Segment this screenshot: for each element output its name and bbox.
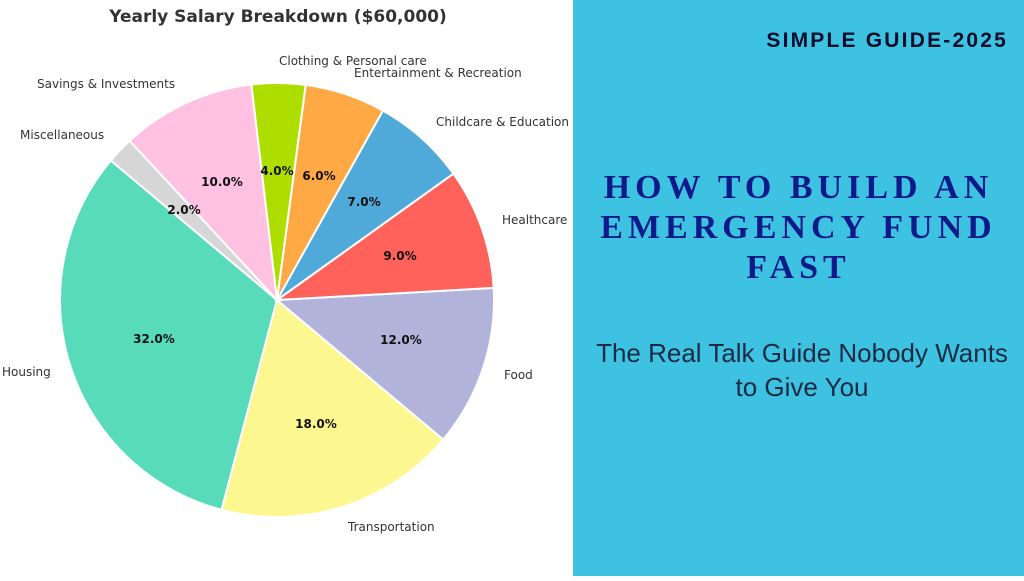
category labels: Transportation <box>347 520 435 534</box>
category labels: Entertainment & Recreation <box>354 66 522 80</box>
category labels: Food <box>504 368 533 382</box>
category labels: Miscellaneous <box>20 128 104 142</box>
main title: HOW TO BUILD AN <box>604 169 993 206</box>
tag: simple guide: SIMPLE GUIDE-2025 <box>766 29 1008 52</box>
percentage labels: 10.0% <box>201 175 243 189</box>
category labels: Savings & Investments <box>37 77 175 91</box>
percentage labels: 12.0% <box>380 333 422 347</box>
main title <box>600 169 997 286</box>
percentage labels: 32.0% <box>133 332 175 346</box>
category labels: Healthcare <box>502 213 567 227</box>
panel: pie chart <box>0 0 573 576</box>
percentage labels <box>133 164 422 431</box>
pie chart <box>60 83 494 517</box>
category labels: Childcare & Education <box>436 115 569 129</box>
panel: title side <box>573 0 1024 576</box>
main title: EMERGENCY FUND <box>600 209 997 246</box>
percentage labels: 2.0% <box>167 203 201 217</box>
subtitle <box>596 338 1008 402</box>
category labels: Housing <box>2 365 51 379</box>
subtitle: to Give You <box>736 372 868 402</box>
percentage labels: 9.0% <box>383 249 417 263</box>
main title: FAST <box>746 249 851 286</box>
chart title: Yearly Salary Breakdown ($60,000) <box>108 7 447 27</box>
percentage labels: 6.0% <box>302 169 336 183</box>
category labels <box>2 54 569 534</box>
subtitle: The Real Talk Guide Nobody Wants <box>596 338 1008 368</box>
category labels: Clothing & Personal care <box>279 54 427 68</box>
percentage labels: 4.0% <box>260 164 294 178</box>
percentage labels: 18.0% <box>295 417 337 431</box>
percentage labels: 7.0% <box>347 195 381 209</box>
